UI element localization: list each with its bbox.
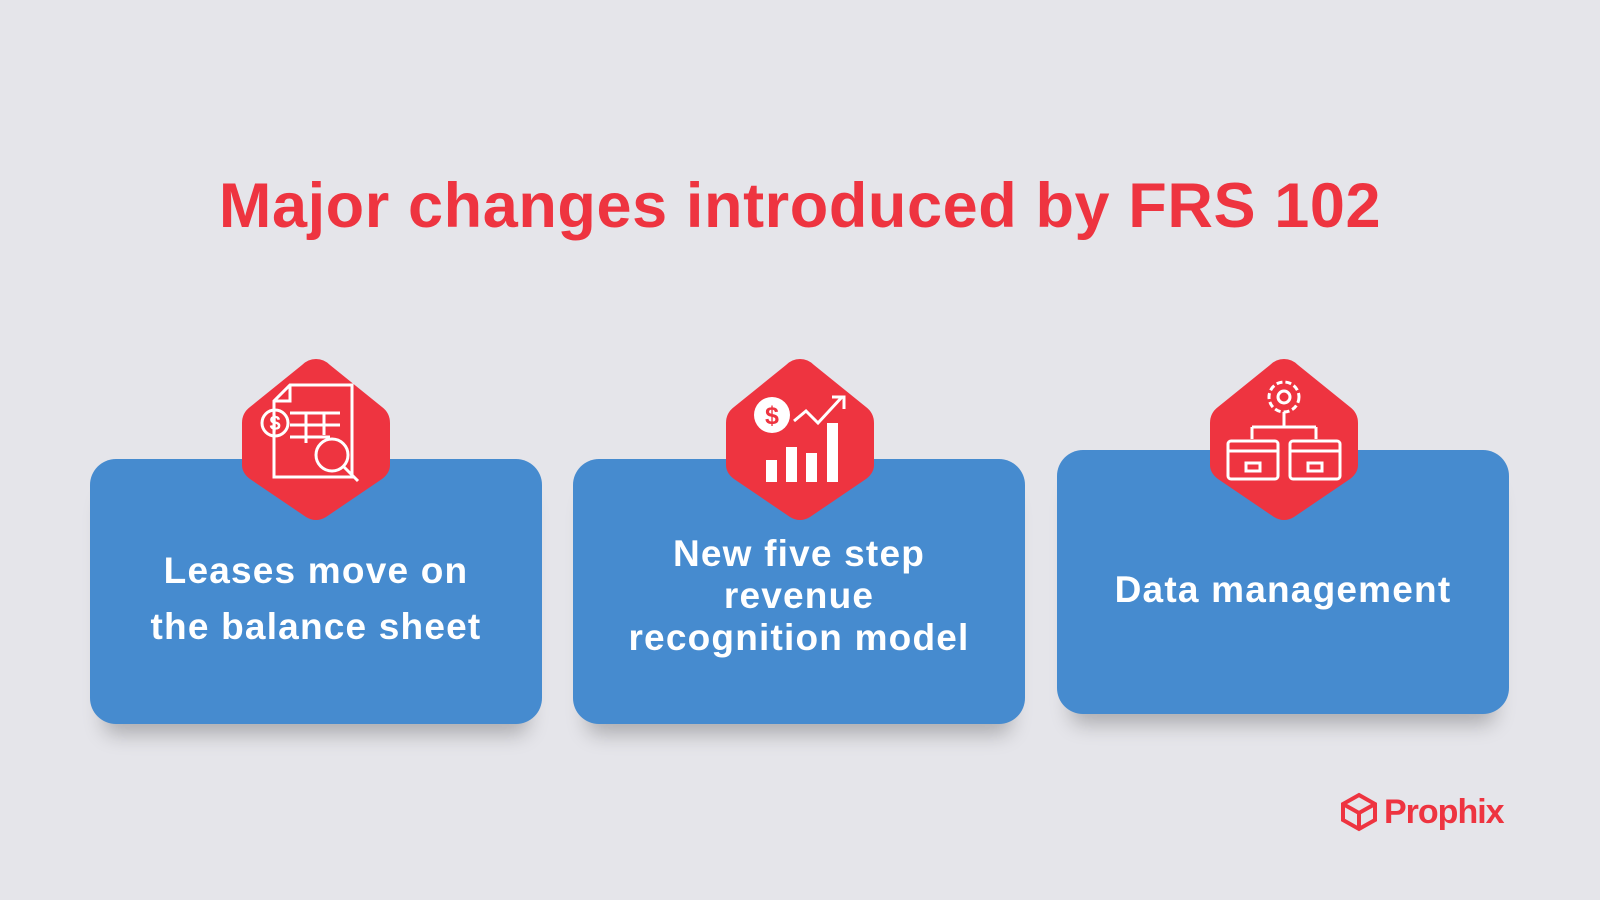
card: leases (90, 459, 542, 724)
card text: revenue (724, 575, 874, 616)
card: revenue (573, 459, 1025, 724)
icon: revenue chart hexagon: $ (765, 402, 779, 430)
title: Major changes introduced by FRS 102 (219, 171, 1381, 241)
icon: lease document hexagon: $ (269, 413, 281, 435)
card: data (1057, 450, 1509, 714)
icon: revenue chart hexagon (726, 359, 874, 520)
icon: data management hexagon (1210, 359, 1358, 520)
card text (150, 550, 481, 647)
card text: New five step (673, 533, 925, 574)
logo: Prophix: Prophix (1384, 792, 1504, 830)
card text (628, 533, 970, 658)
card text: recognition model (628, 617, 970, 658)
card text: Leases move on (164, 550, 468, 591)
card text: the balance sheet (151, 606, 481, 647)
icon: logo cube (1341, 792, 1377, 832)
icon: lease document hexagon (242, 359, 390, 520)
card text: Data management (1115, 569, 1451, 610)
